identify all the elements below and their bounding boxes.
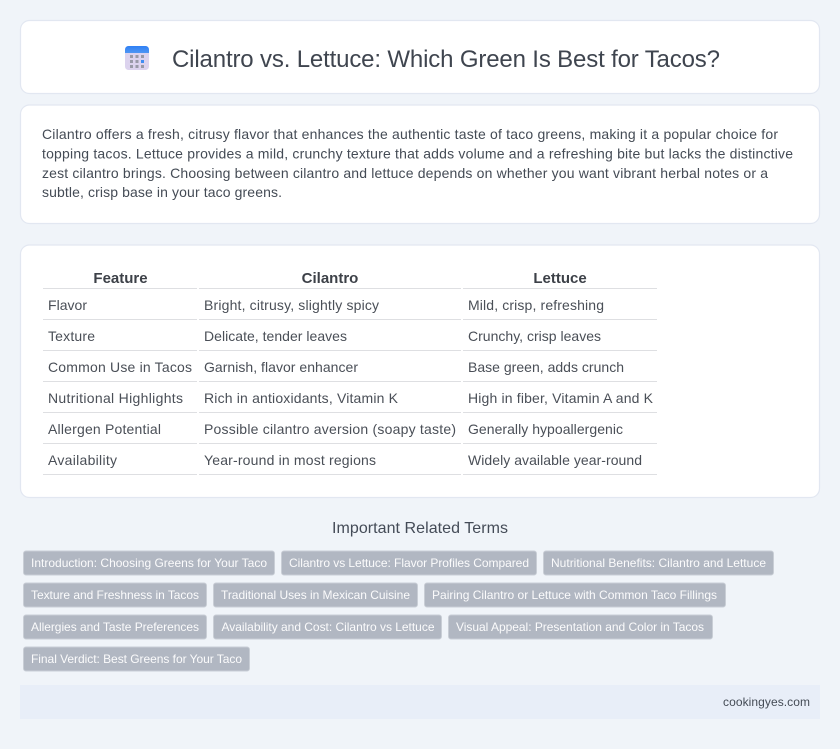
row: nutrition: High in fiber, Vitamin A and K bbox=[468, 390, 654, 406]
text block: introduction bbox=[42, 126, 793, 200]
tag bbox=[214, 583, 418, 607]
tag bbox=[24, 551, 274, 575]
row: availability: Availability bbox=[48, 452, 117, 468]
row: flavor: Bright, citrusy, slightly spicy bbox=[204, 297, 379, 313]
tag bbox=[24, 647, 250, 671]
row: availability: Year-round in most regions bbox=[204, 452, 376, 468]
tag bbox=[24, 583, 206, 607]
tag: Allergies and Taste Preferences bbox=[31, 620, 199, 634]
tag: Introduction: Choosing Greens for Your Taco bbox=[31, 556, 267, 570]
row: texture bbox=[48, 328, 601, 344]
table header: Lettuce bbox=[533, 270, 587, 287]
tag: Final Verdict: Best Greens for Your Taco bbox=[31, 652, 242, 666]
row: texture: Texture bbox=[48, 328, 95, 344]
row: nutrition: Rich in antioxidants, Vitamin K bbox=[204, 390, 399, 406]
tag: Nutritional Benefits: Cilantro and Lettuce bbox=[551, 556, 766, 570]
row: flavor bbox=[48, 297, 604, 313]
row: allergen: Generally hypoallergenic bbox=[468, 421, 623, 437]
row: texture: Crunchy, crisp leaves bbox=[468, 328, 601, 344]
row: nutrition bbox=[48, 390, 654, 406]
heading: related terms: Important Related Terms bbox=[332, 520, 508, 537]
tag: Visual Appeal: Presentation and Color in Tacos bbox=[456, 620, 704, 634]
row: flavor: Mild, crisp, refreshing bbox=[468, 297, 604, 313]
row: texture: Delicate, tender leaves bbox=[204, 328, 347, 344]
row: nutrition: Nutritional Highlights bbox=[48, 390, 183, 406]
tag: Pairing Cilantro or Lettuce with Common Taco Fillings bbox=[432, 588, 717, 602]
table header: Cilantro bbox=[302, 270, 358, 287]
header panel bbox=[20, 20, 820, 94]
row: common use: Common Use in Tacos bbox=[48, 359, 192, 375]
row: allergen: Possible cilantro aversion (soapy taste) bbox=[204, 421, 456, 437]
tag bbox=[282, 551, 536, 575]
icon: calendar bbox=[125, 46, 149, 70]
tag bbox=[448, 615, 712, 639]
text block: introduction: zest cilantro brings. Choosing between cilantro and lettuce depends on whether you want vibrant herbal notes or a bbox=[42, 165, 768, 181]
tag: Texture and Freshness in Tacos bbox=[31, 588, 199, 602]
tag bbox=[214, 615, 442, 639]
row: common use: Base green, adds crunch bbox=[468, 359, 624, 375]
text block: introduction: Cilantro offers a fresh, citrusy flavor that enhances the authentic taste of taco greens, making it a popular choice for bbox=[42, 126, 778, 142]
footer bbox=[20, 685, 820, 719]
tag: Traditional Uses in Mexican Cuisine bbox=[221, 588, 410, 602]
related term tags bbox=[24, 551, 774, 671]
row: flavor: Flavor bbox=[48, 297, 87, 313]
tag: Availability and Cost: Cilantro vs Lettuce bbox=[222, 620, 435, 634]
tag bbox=[544, 551, 774, 575]
text block: introduction: topping tacos. Lettuce provides a mild, crunchy texture that adds volume and a refreshing bite but lacks the distinctive bbox=[42, 146, 793, 162]
panel: introduction paragraph bbox=[20, 105, 820, 224]
row: allergen: Allergen Potential bbox=[48, 421, 161, 437]
row: common use: Garnish, flavor enhancer bbox=[204, 359, 358, 375]
text block: introduction: subtle, crisp base in your taco greens. bbox=[42, 184, 282, 200]
tag bbox=[24, 615, 206, 639]
row: common use bbox=[48, 359, 624, 375]
footer source: cookingyes.com bbox=[723, 695, 810, 709]
title: Cilantro vs. Lettuce: Which Green Is Best for Tacos? bbox=[172, 46, 720, 73]
tag bbox=[424, 583, 726, 607]
tag: Cilantro vs Lettuce: Flavor Profiles Compared bbox=[289, 556, 529, 570]
table header: Feature bbox=[93, 270, 148, 287]
row: allergen bbox=[48, 421, 623, 437]
row: availability bbox=[48, 452, 642, 468]
row: availability: Widely available year-round bbox=[468, 452, 642, 468]
panel: comparison table bbox=[20, 245, 820, 498]
table header bbox=[93, 270, 587, 287]
